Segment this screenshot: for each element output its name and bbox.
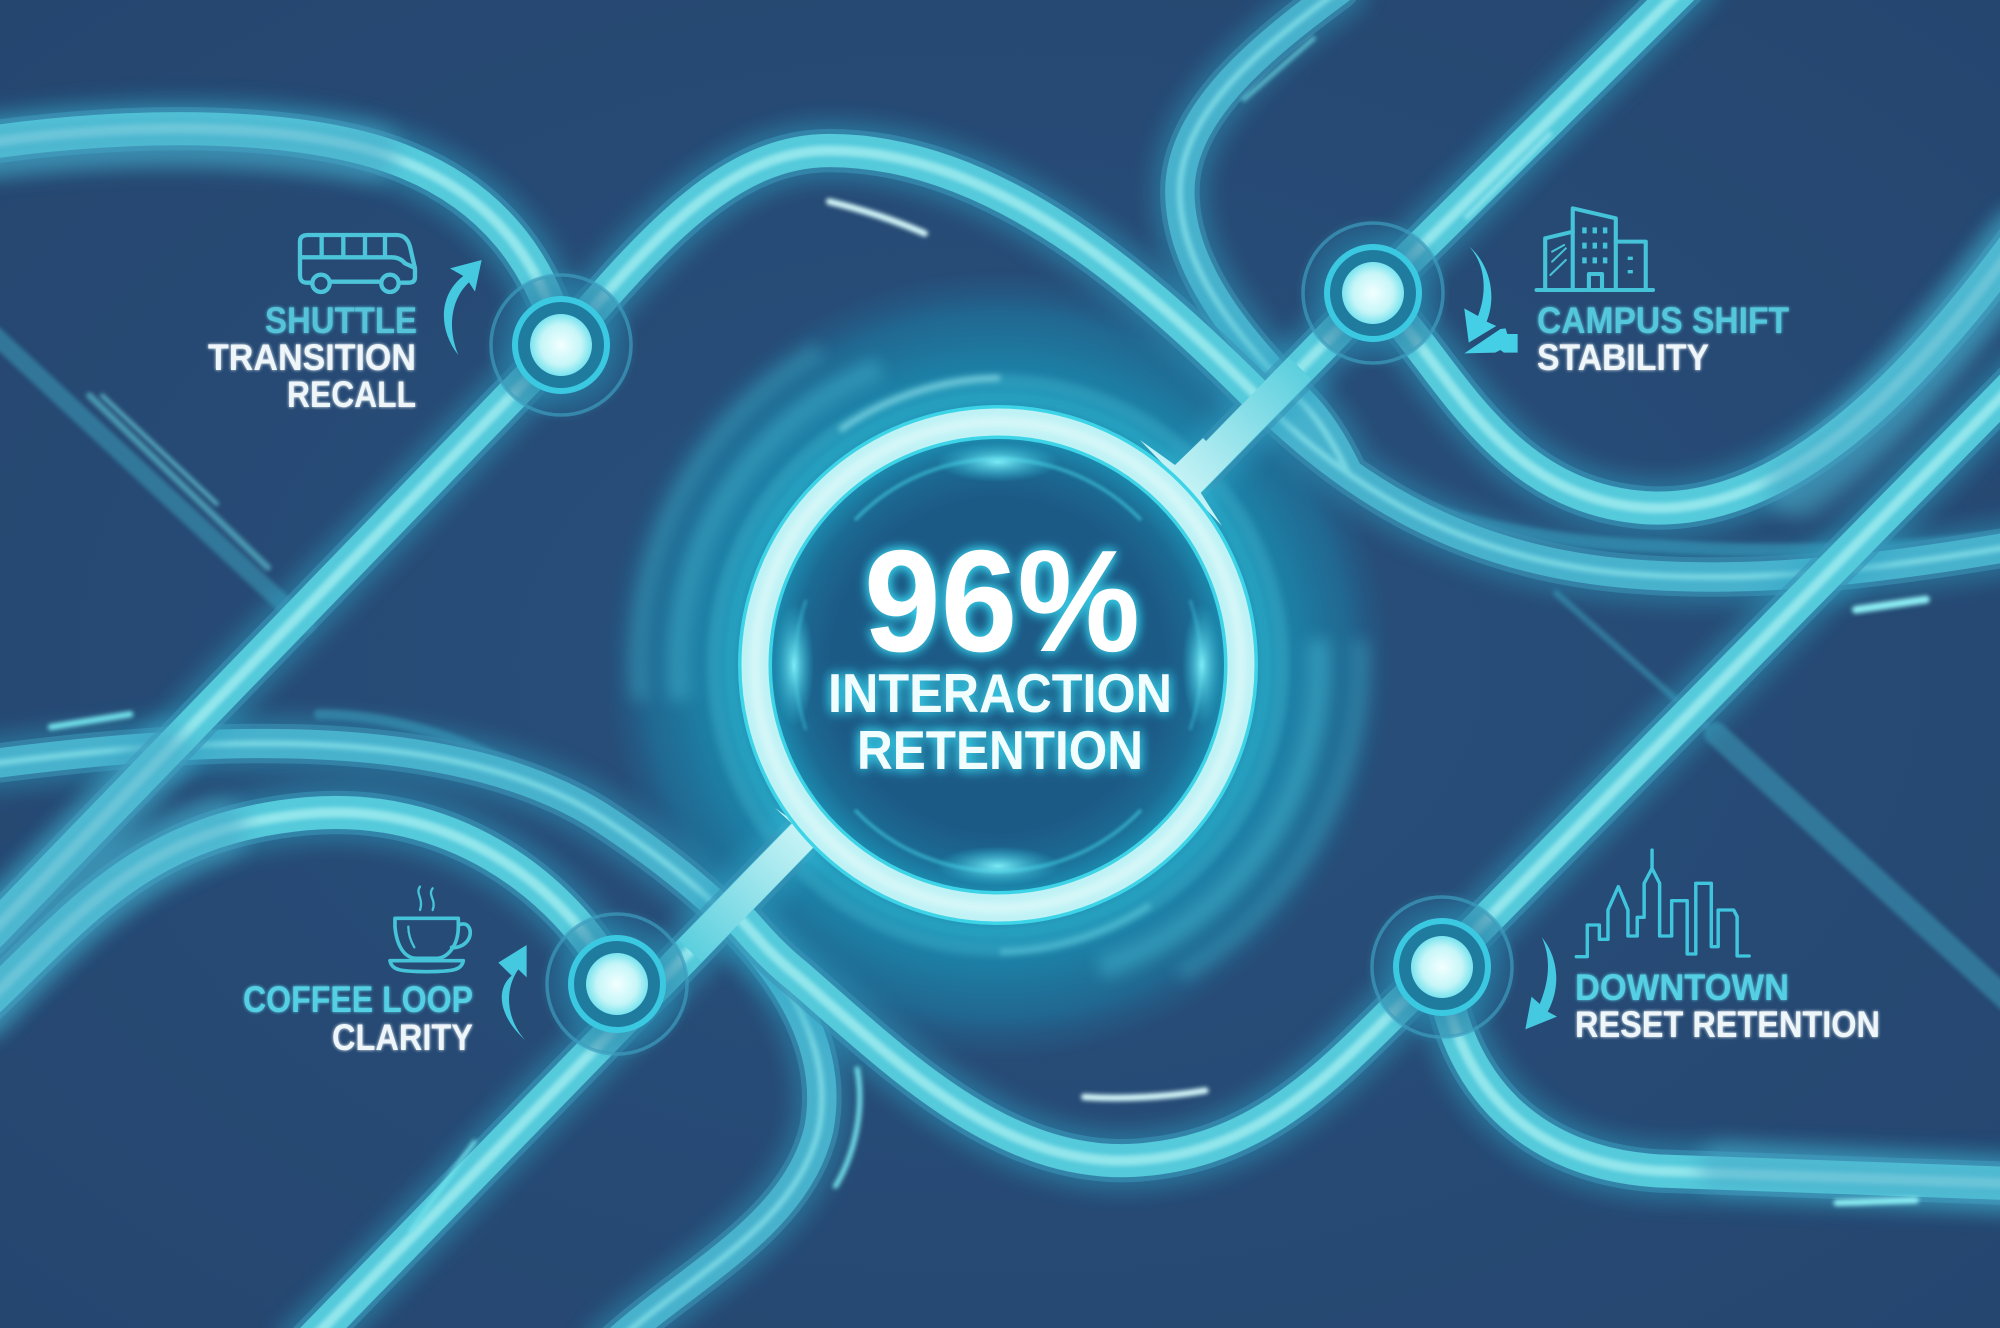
stat label: INTERACTION: [828, 662, 1172, 724]
wide blurred track ends: [0, 140, 2000, 1186]
label: downtown: DOWNTOWN: [1575, 967, 1789, 1008]
label: coffee: CLARITY: [332, 1017, 473, 1058]
label: campus: [1537, 300, 1789, 378]
label: downtown: [1575, 967, 1880, 1045]
icon: coffee cup: [390, 887, 470, 972]
node: coffee: [539, 906, 695, 1062]
faint background diagonals: [0, 334, 2000, 1001]
icon: buildings: [1537, 208, 1653, 290]
label: shuttle: [208, 300, 417, 415]
headline stat: 96%: [864, 520, 1140, 682]
stat label: RETENTION: [857, 719, 1143, 781]
swirl halo around centre: [598, 265, 1398, 1065]
label: shuttle: SHUTTLE: [265, 300, 417, 341]
node: shuttle: [483, 267, 639, 423]
arrow: campus: [1464, 247, 1518, 353]
icon: skyline: [1576, 850, 1749, 957]
label: shuttle: RECALL: [287, 374, 416, 415]
label: campus: STABILITY: [1537, 337, 1709, 378]
arrow: downtown: [1525, 937, 1557, 1029]
stat label: [828, 662, 1172, 781]
central ring: [690, 368, 1300, 951]
label: shuttle: TRANSITION: [208, 337, 416, 378]
label: downtown: RESET RETENTION: [1575, 1004, 1880, 1045]
icon: bus: [300, 235, 415, 292]
node: campus: [1295, 215, 1451, 371]
label: coffee: [243, 979, 473, 1058]
arrow: shuttle: [444, 260, 482, 355]
label: campus: CAMPUS SHIFT: [1537, 300, 1789, 341]
label: coffee: COFFEE LOOP: [243, 979, 473, 1020]
arrow: coffee: [498, 945, 527, 1040]
node: downtown: [1364, 889, 1520, 1045]
